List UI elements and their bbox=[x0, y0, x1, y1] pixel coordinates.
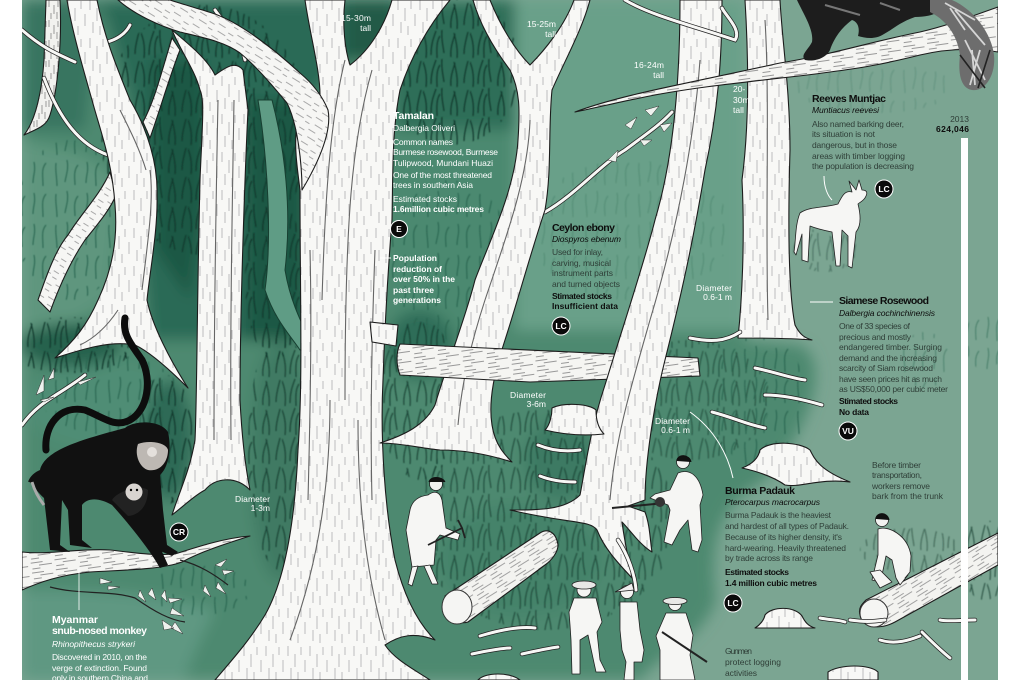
badge: CR bbox=[170, 523, 188, 541]
label: tree height 16-24m: tall bbox=[653, 70, 664, 80]
callout: population reduction: Population bbox=[393, 253, 437, 263]
callout: population reduction: over 50% in the bbox=[393, 274, 455, 284]
tree: far left thin trunk and branches bbox=[22, 0, 245, 155]
label: tree height 20-30m: tall bbox=[733, 105, 744, 115]
text block: Tamalan: Tamalan bbox=[393, 110, 434, 122]
label: diameter 1-3m bbox=[235, 494, 270, 513]
text block: Siamese Rosewood bbox=[810, 295, 948, 440]
label: tree height 16-24m: 16-24m bbox=[634, 60, 664, 70]
text block: Tamalan bbox=[390, 110, 498, 238]
label: tree height 15-30m: tall bbox=[360, 23, 371, 33]
text block: Tamalan: Burmese rosewood, Burmese bbox=[393, 147, 498, 157]
label: diameter 3-6m: 3-6m bbox=[527, 399, 546, 409]
text block: Ceylon ebony: Insufficient data bbox=[552, 301, 618, 311]
animal: Myanmar snub-nosed monkey bbox=[28, 318, 178, 568]
text block: Siamese Rosewood: scarcity of Siam rosewood bbox=[839, 363, 933, 373]
label: diameter 0.6-1 m upper: 0.6-1 m bbox=[703, 292, 732, 302]
label: diameter 3-6m bbox=[510, 390, 546, 409]
text block: Tamalan: trees in southern Asia bbox=[393, 180, 473, 190]
label: tree height 15-30m: 15-30m bbox=[341, 13, 371, 23]
text block: Burma Padauk: Because of its higher density, it's bbox=[725, 532, 842, 542]
label: diameter 0.6-1 m upper: Diameter bbox=[696, 283, 732, 293]
text block: Myanmar snub-nosed monkey: Rhinopithecus strykeri bbox=[52, 639, 136, 649]
text block: Burma Padauk: Estimated stocks bbox=[725, 567, 789, 577]
text block: Ceylon ebony: Stimated stocks bbox=[552, 291, 612, 301]
text block: Tamalan: 1.6million cubic metres bbox=[393, 204, 484, 214]
badge: E: E bbox=[396, 224, 402, 234]
text block: Burma Padauk: hard-wearing. Heavily threatened bbox=[725, 543, 846, 553]
label: tree height 20-30m: 20- bbox=[733, 84, 745, 94]
text block: Burma Padauk: Burma Padauk bbox=[725, 485, 795, 497]
text block: Reeves Muntjac: Reeves Muntjac bbox=[812, 93, 886, 105]
text block: Siamese Rosewood: have seen prices hit as much bbox=[839, 374, 942, 384]
text block: Reeves Muntjac: dangerous, but in those bbox=[812, 140, 897, 150]
text block: Siamese Rosewood: Siamese Rosewood bbox=[839, 295, 929, 307]
text block: Siamese Rosewood: Stimated stocks bbox=[839, 396, 898, 406]
tree: second trunk bbox=[172, 30, 250, 515]
caption: bark removal: bark from the trunk bbox=[872, 491, 944, 501]
text block: Siamese Rosewood: endangered timber. Surging bbox=[839, 342, 942, 352]
animal: Reeves muntjac deer bbox=[794, 176, 867, 268]
timeline label 2013: 624,046 bbox=[936, 124, 969, 134]
text block: Burma Padauk: by trade across its range bbox=[725, 553, 813, 563]
label: diameter 1-3m: Diameter bbox=[235, 494, 270, 504]
label: diameter 0.6-1 m lower: Diameter bbox=[655, 416, 690, 426]
text block: Tamalan: One of the most threatened bbox=[393, 170, 492, 180]
label: tree height 15-25m bbox=[527, 19, 556, 39]
label: tree height 20-30m: 30m bbox=[733, 95, 750, 105]
text block: Reeves Muntjac: Muntiacus reevesi bbox=[812, 105, 880, 115]
scattered twigs on the ground bbox=[472, 368, 975, 658]
text block: Reeves Muntjac: the population is decreasing bbox=[812, 161, 914, 171]
fallen log behind bbox=[397, 344, 700, 382]
caption: gunmen: Gunmen bbox=[725, 646, 752, 656]
tree stumps bbox=[370, 322, 878, 680]
monkey branch with leaves bbox=[22, 368, 250, 634]
top right branch bbox=[575, 7, 998, 112]
people: woman with axe bbox=[406, 478, 465, 586]
label: diameter 1-3m: 1-3m bbox=[251, 503, 270, 513]
caption: gunmen: activities bbox=[725, 668, 757, 678]
text block: Burma Padauk: Pterocarpus macrocarpus bbox=[725, 497, 821, 507]
caption: gunmen bbox=[725, 646, 781, 678]
label: tree height 16-24m bbox=[634, 60, 664, 80]
badge: CR: CR bbox=[173, 527, 185, 537]
tree: upper branch behind left trunk bbox=[143, 38, 180, 138]
branches at top middle bbox=[625, 0, 740, 340]
text block: Myanmar snub-nosed monkey: snub-nosed monkey bbox=[52, 625, 147, 637]
tree: large left trunk bbox=[55, 0, 188, 388]
text block: Myanmar snub-nosed monkey: Myanmar bbox=[52, 614, 98, 626]
label: diameter 0.6-1 m lower: 0.6-1 m bbox=[661, 425, 690, 435]
animal: binturong on the branch bbox=[797, 0, 994, 90]
text block: Reeves Muntjac: Also named barking deer, bbox=[812, 119, 904, 129]
label: tree height 15-30m bbox=[341, 13, 371, 33]
text block: Ceylon ebony: and turned objects bbox=[552, 279, 620, 289]
text block: Burma Padauk: 1.4 million cubic metres bbox=[725, 578, 817, 588]
text block: Siamese Rosewood: Dalbergia cochinchinensis bbox=[839, 308, 936, 318]
white timeline bar bbox=[961, 138, 968, 680]
tree: Burma Padauk trunk with chainsaw notch bbox=[510, 0, 722, 590]
label: diameter 3-6m: Diameter bbox=[510, 390, 546, 400]
callout: population reduction: past three bbox=[393, 285, 434, 295]
label: tree height 15-25m: 15-25m bbox=[527, 19, 556, 29]
people: chainsaw man bbox=[612, 456, 703, 552]
text block: Siamese Rosewood: demand and the increasing bbox=[839, 353, 937, 363]
text block: Siamese Rosewood: as US$50,000 per cubic meter bbox=[839, 384, 948, 394]
people: two inspectors and armed guard bbox=[569, 581, 707, 680]
callout: population reduction: reduction of bbox=[393, 264, 442, 274]
text block: Tamalan: Common names bbox=[393, 137, 453, 147]
badge: LC: LC bbox=[555, 321, 567, 331]
label: diameter 0.6-1 m lower bbox=[655, 416, 690, 435]
text block: Reeves Muntjac: its situation is not bbox=[812, 129, 876, 139]
worker's log at right bbox=[859, 533, 998, 627]
text block: Ceylon ebony: carving, musical bbox=[552, 258, 611, 268]
text block: Siamese Rosewood: One of 33 species of bbox=[839, 321, 911, 331]
text block: Siamese Rosewood: No data bbox=[839, 407, 869, 417]
text block: Tamalan: Dalbergia Oliveri bbox=[393, 123, 455, 133]
tree: right trunk bbox=[738, 0, 812, 340]
text block: Siamese Rosewood: precious and mostly bbox=[839, 332, 912, 342]
callout: population reduction bbox=[380, 253, 455, 305]
timeline label 2013 bbox=[936, 114, 969, 134]
text block: Tamalan: Estimated stocks bbox=[393, 194, 457, 204]
caption: bark removal: transportation, bbox=[872, 470, 922, 480]
text block: Myanmar snub-nosed monkey: verge of extinction. Found bbox=[52, 663, 147, 673]
text block: Ceylon ebony: instrument parts bbox=[552, 268, 613, 278]
text block: Myanmar snub-nosed monkey bbox=[52, 568, 148, 680]
text block: Ceylon ebony: Diospyros ebenum bbox=[552, 234, 621, 244]
text block: Ceylon ebony: Used for inlay, bbox=[552, 247, 603, 257]
text block: Burma Padauk: and hardest of all types of Padauk. bbox=[725, 521, 849, 531]
callout: population reduction: generations bbox=[393, 295, 441, 305]
text block: Tamalan: Tulipwood, Mundani Huazi bbox=[393, 158, 493, 168]
tree: large central trunk bbox=[118, 0, 450, 680]
tree: Ceylon ebony trunk with side branch bbox=[380, 0, 672, 462]
label: diameter 0.6-1 m upper bbox=[696, 283, 732, 302]
fallen cut log bbox=[442, 531, 558, 624]
badge: LC: LC bbox=[878, 184, 890, 194]
badge: LC: LC bbox=[727, 598, 739, 608]
pointer line: Burma Padauk bbox=[690, 412, 733, 478]
timeline label 2013: 2013 bbox=[950, 114, 969, 124]
caption: gunmen: protect logging bbox=[725, 657, 781, 667]
text block: Ceylon ebony: Ceylon ebony bbox=[552, 222, 615, 234]
text block: Ceylon ebony bbox=[552, 222, 621, 335]
text block: Reeves Muntjac bbox=[812, 93, 914, 198]
tree: background green trunk bbox=[258, 100, 312, 350]
label: tree height 20-30m bbox=[733, 84, 750, 115]
text block: Burma Padauk: Burma Padauk is the heaviest bbox=[725, 510, 832, 520]
caption: bark removal: Before timber bbox=[872, 460, 921, 470]
badge: VU: VU bbox=[842, 426, 854, 436]
leaves on the ebony branch bbox=[608, 106, 672, 162]
text block: Burma Padauk bbox=[724, 485, 849, 612]
caption: bark removal bbox=[871, 460, 944, 501]
caption: bark removal: workers remove bbox=[871, 481, 930, 491]
badge: VU bbox=[839, 422, 857, 440]
people: worker removing bark bbox=[870, 514, 911, 588]
text block: Myanmar snub-nosed monkey: Discovered in 2010, on the bbox=[52, 652, 147, 662]
label: tree height 15-25m: tall bbox=[545, 29, 556, 39]
text block: Reeves Muntjac: areas with timber logging bbox=[812, 151, 905, 161]
tree: left slanted branch trunk bbox=[38, 172, 116, 312]
